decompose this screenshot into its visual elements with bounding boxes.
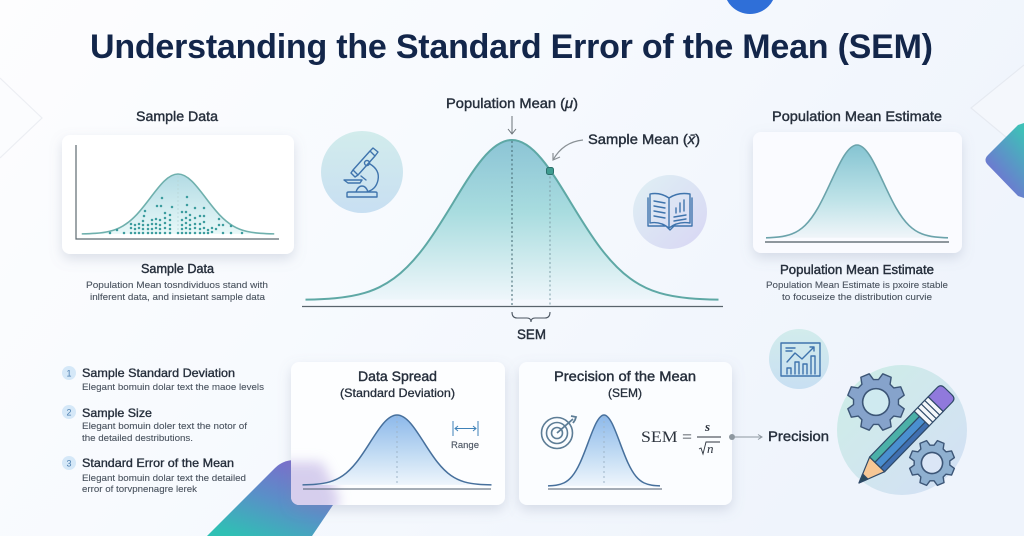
subheading: SEM: (SEM) <box>608 386 642 400</box>
large gear <box>839 365 913 439</box>
description: estimate: to focuseize the distribution curvie <box>782 291 932 302</box>
decoration: left outline diamond <box>0 78 42 158</box>
arrow: sample mean <box>553 140 583 160</box>
icon: range arrow <box>453 421 478 436</box>
heading: population mean estimate: Population Mean Estimate <box>772 108 942 124</box>
mean dashed line <box>603 416 605 486</box>
card: estimate chart <box>753 132 962 253</box>
sample mean dashed line <box>549 172 551 306</box>
panel: data spread <box>270 362 505 520</box>
formula: SEM: s <box>704 419 710 434</box>
description: sample data: inlferent data, and insietant sample data <box>90 291 266 302</box>
chart: wide curve <box>302 415 492 485</box>
panel: sample data <box>62 108 294 302</box>
item 3: error of torvpnenagre lerek <box>82 483 197 494</box>
panel: central normal curve <box>302 95 723 342</box>
subheading: estimate: Population Mean Estimate <box>780 263 934 277</box>
decoration: right outline diamond <box>971 65 1024 152</box>
glass blur over card corner <box>291 456 344 505</box>
icon: microscope <box>321 131 403 213</box>
chart: estimate curve <box>766 145 948 238</box>
item 3: Standard Error of the Mean <box>82 456 234 470</box>
chart: narrow curve <box>548 415 660 486</box>
item 3 <box>62 456 246 494</box>
item 2: the detailed destributions. <box>82 432 193 443</box>
item 2 <box>62 405 247 443</box>
item 2: Sample Size <box>82 406 152 420</box>
item 2: Elegant bomuin doler text the notor of <box>82 420 247 431</box>
decoration: top blue circle <box>724 0 776 14</box>
card <box>519 362 732 505</box>
population mean dashed line <box>511 141 513 306</box>
icon: book <box>633 175 707 249</box>
marker: sample mean <box>546 168 554 174</box>
chart: normal curve <box>306 140 718 300</box>
backdrop circle <box>837 365 967 495</box>
card: sample data chart <box>62 135 294 254</box>
label: range: Range <box>451 440 479 451</box>
description: sample data: Population Mean tosndividuos stand with <box>86 279 268 290</box>
axis <box>765 241 949 243</box>
item 3: Elegant bomuin dolar text the detailed <box>82 472 246 483</box>
label: precision: Precision <box>768 428 829 444</box>
label: sample mean: Sample Mean ( x̄) <box>588 131 700 147</box>
icon: pencil and gears <box>837 365 967 495</box>
subheading: standard deviation: (Standard Deviation) <box>340 386 455 400</box>
card <box>291 362 505 505</box>
decoration: right gradient diamond <box>986 123 1024 198</box>
item 1: Elegant bomuin dolar text the maoe levels <box>82 381 264 392</box>
pencil <box>851 384 956 490</box>
arrow: population mean <box>508 116 516 134</box>
subheading: sample data: Sample Data <box>141 262 214 276</box>
item 1: 1 <box>66 368 72 378</box>
formula: SEM: n <box>707 441 714 456</box>
icon: growth chart <box>769 329 829 389</box>
axis <box>303 488 491 490</box>
arrow: SEM to precision <box>729 434 762 440</box>
item 3: 3 <box>66 458 72 468</box>
small gear <box>902 433 962 493</box>
label: population mean: Population Mean ( μ) <box>446 95 578 111</box>
heading: data spread: Data Spread <box>358 368 437 384</box>
axis <box>548 488 662 490</box>
label: SEM: SEM <box>517 326 546 342</box>
panel: precision of the mean <box>519 362 732 505</box>
item 1 <box>62 366 264 392</box>
item 2: 2 <box>66 408 72 418</box>
axis <box>302 306 723 308</box>
chart: sample distribution with dots <box>76 145 279 239</box>
mean dashed line <box>396 416 398 486</box>
panel: population mean estimate <box>753 108 962 302</box>
heading: sample data: Sample Data <box>136 108 218 124</box>
description: estimate: Population Mean Estimate is pxoire stable <box>766 279 948 290</box>
heading: precision: Precision of the Mean <box>554 368 696 384</box>
item 1: Sample Standard Deviation <box>82 366 235 380</box>
decoration: bottom-left gradient shape <box>207 460 333 536</box>
formula: SEM: SEM = <box>641 429 692 446</box>
icon: target <box>542 416 576 448</box>
list: key terms <box>62 366 264 494</box>
formula: SEM <box>641 419 721 456</box>
title: Understanding the Standard Error of the Mean (SEM) <box>90 28 933 66</box>
bracket: SEM <box>512 312 550 322</box>
